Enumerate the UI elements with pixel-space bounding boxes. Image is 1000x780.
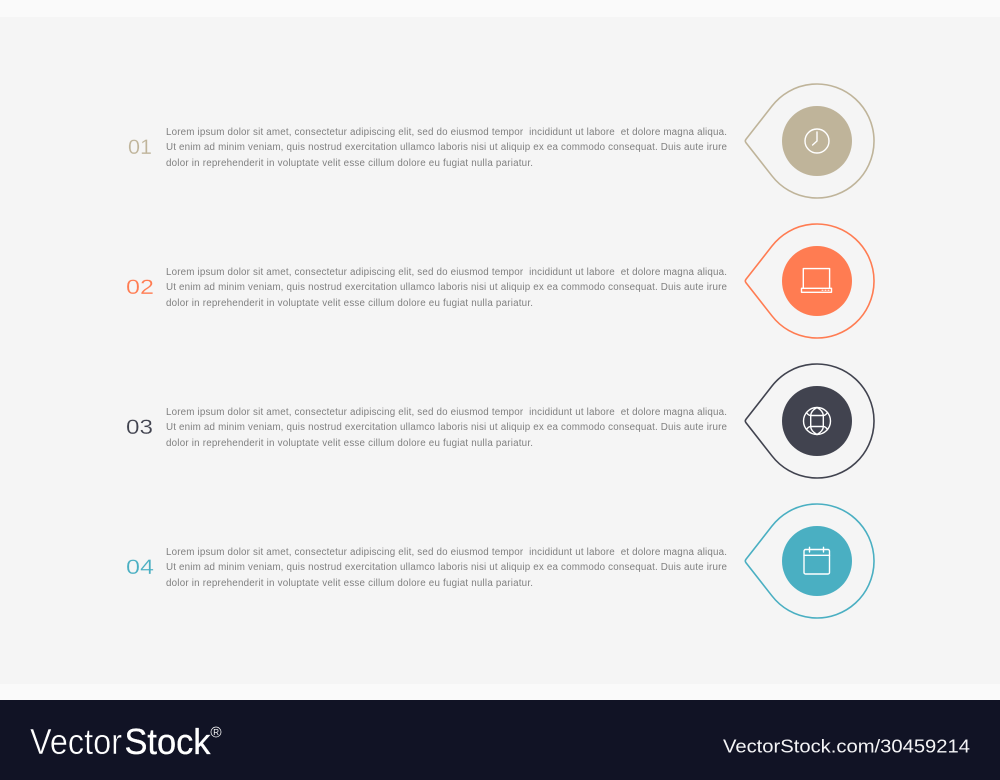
footer logo [30,721,221,762]
text block 1: Lorem ipsum dolor sit amet, consectetur adipiscing elit, sed do eiusmod tempor incididunt ut labore et dolore magna aliqua. [166,127,727,138]
filled circle 2 [782,246,852,316]
text block 3: Lorem ipsum dolor sit amet, consectetur adipiscing elit, sed do eiusmod tempor incididunt ut labore et dolore magna aliqua. [166,407,727,418]
text block 1: dolor in reprehenderit in voluptate velit esse cillum dolore eu fugiat nulla pariatur. [166,158,533,169]
text block 2: Lorem ipsum dolor sit amet, consectetur adipiscing elit, sed do eiusmod tempor incididunt ut labore et dolore magna aliqua. [166,267,727,278]
number 02: 02 [126,276,154,299]
footer logo: Vector [30,721,122,762]
pin outline 3 [745,364,874,478]
row 4: calendar item [126,504,874,618]
text block 4: dolor in reprehenderit in voluptate velit esse cillum dolore eu fugiat nulla pariatur. [166,578,533,589]
footer logo: Stock [124,721,211,762]
row 3: globe item [126,364,874,478]
footer logo: R [213,728,219,737]
icon: clock [805,129,829,153]
icon: globe [804,408,830,434]
text block 2: Ut enim ad minim veniam, quis nostrud exercitation ullamco laboris nisi ut aliquip ex ea commodo consequat. Duis aute irure [166,282,728,293]
footer image id: VectorStock.com/30459214 [723,736,970,756]
number 03: 03 [126,416,153,439]
filled circle 4 [782,526,852,596]
text block 4: Ut enim ad minim veniam, quis nostrud exercitation ullamco laboris nisi ut aliquip ex ea commodo consequat. Duis aute irure [166,562,728,573]
pin outline 1 [745,84,874,198]
number 01: 01 [128,136,152,159]
pin outline 4 [745,504,874,618]
icon: laptop [802,269,832,292]
text block 4 [166,547,728,589]
filled circle 3 [782,386,852,456]
text block 2: dolor in reprehenderit in voluptate velit esse cillum dolore eu fugiat nulla pariatur. [166,298,533,309]
text block 3: dolor in reprehenderit in voluptate velit esse cillum dolore eu fugiat nulla pariatur. [166,438,533,449]
text block 1 [166,127,728,169]
filled circle 1 [782,106,852,176]
pin outline 2 [745,224,874,338]
row 2: laptop item [126,224,874,338]
footer bar [0,700,1000,780]
text block 4: Lorem ipsum dolor sit amet, consectetur adipiscing elit, sed do eiusmod tempor incididunt ut labore et dolore magna aliqua. [166,547,727,558]
text block 3: Ut enim ad minim veniam, quis nostrud exercitation ullamco laboris nisi ut aliquip ex ea commodo consequat. Duis aute irure [166,422,728,433]
icon: calendar [804,547,830,574]
text block 2 [166,267,728,309]
row 1: clock item [128,84,874,198]
number 04: 04 [126,556,154,579]
text block 1: Ut enim ad minim veniam, quis nostrud exercitation ullamco laboris nisi ut aliquip ex ea commodo consequat. Duis aute irure [166,142,728,153]
text block 3 [166,407,728,449]
